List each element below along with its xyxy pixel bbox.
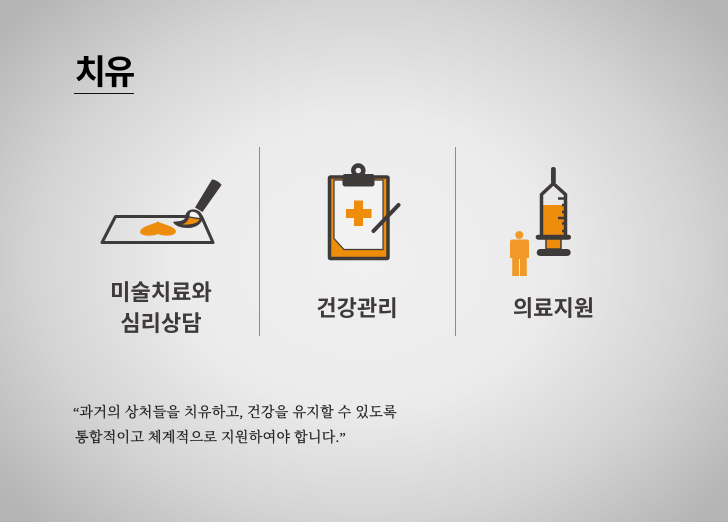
cross	[346, 200, 372, 226]
title: 치유	[75, 54, 133, 92]
person	[510, 231, 529, 276]
brush head	[173, 209, 203, 228]
label: medical support: 의료지원	[513, 296, 594, 321]
pen stroke	[374, 205, 398, 231]
heart paint	[140, 222, 176, 236]
label: art therapy	[110, 280, 212, 336]
label: health management: 건강관리	[316, 296, 398, 321]
quote line 1: “과거의 상처들을 치유하고, 건강을 유지할 수 있도록	[73, 406, 397, 420]
label: art therapy: 심리상담	[120, 311, 202, 336]
tick marks	[558, 198, 567, 231]
clip	[353, 166, 363, 176]
brush handle	[195, 179, 222, 212]
label: art therapy: 미술치료와	[110, 280, 212, 305]
quote line 2: 통합적이고 체계적으로 지원하여야 합니다.”	[75, 430, 346, 446]
